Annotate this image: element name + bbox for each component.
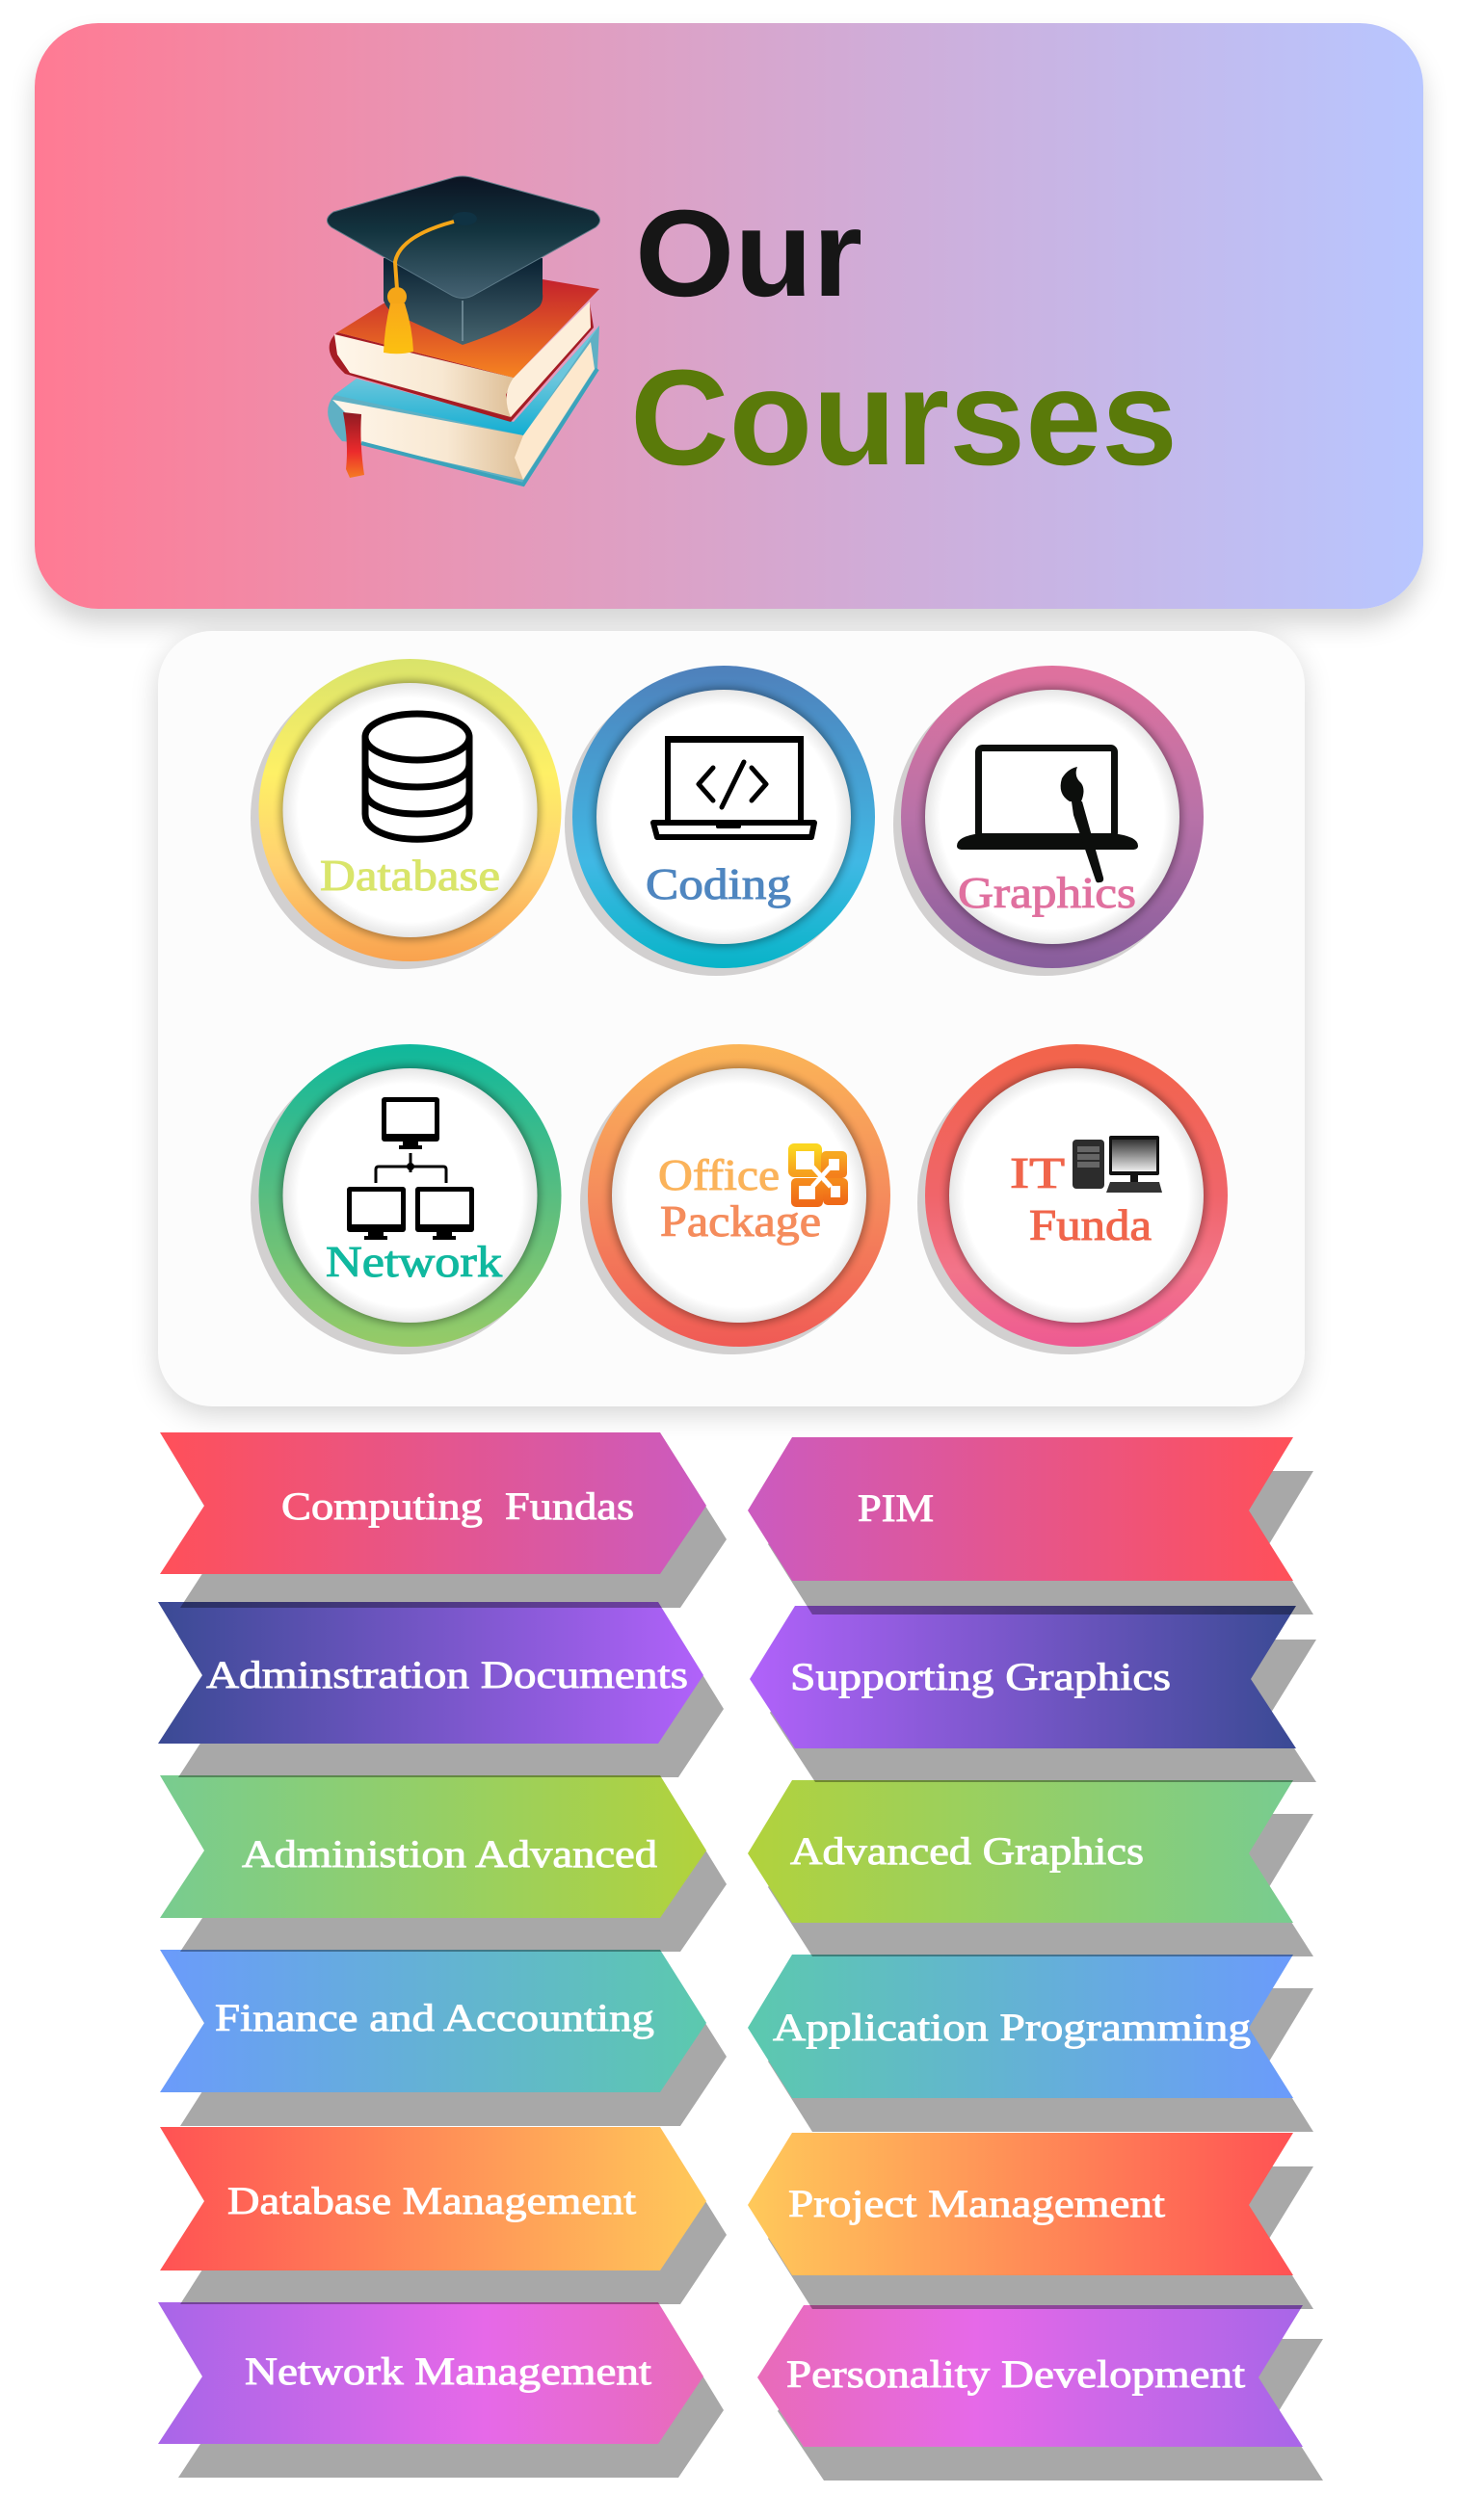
title word: Our: Our xyxy=(635,185,862,323)
ribbon: Supporting Graphics: Supporting Graphics xyxy=(790,1655,1171,1698)
ribbon: Administion Advanced xyxy=(160,1775,727,1952)
ribbon: Advanced Graphics: Advanced Graphics xyxy=(790,1829,1144,1873)
ribbon: Adminstration Documents xyxy=(158,1602,724,1777)
ribbon: Network Management: Network Management xyxy=(245,2349,651,2393)
ribbon: Personality Development xyxy=(757,2305,1323,2481)
ribbon: PIM xyxy=(748,1437,1313,1614)
ribbon: Finance and Accounting xyxy=(160,1950,727,2126)
ribbon: Advanced Graphics xyxy=(748,1780,1313,1956)
label: Package: Package xyxy=(660,1197,821,1246)
icon: laptop with paintbrush xyxy=(957,748,1138,882)
ribbon: Application Programming: Application Programming xyxy=(773,2006,1251,2049)
title word: Courses: Courses xyxy=(630,341,1178,493)
ribbon: Administion Advanced: Administion Advanced xyxy=(242,1832,657,1876)
ribbon: PIM: PIM xyxy=(858,1486,934,1530)
label: Coding: Coding xyxy=(646,860,791,908)
icon: office logo xyxy=(792,1147,844,1203)
icon: laptop with code xyxy=(653,736,814,837)
icon: graduation cap on books xyxy=(327,176,600,486)
ribbon: Project Management xyxy=(748,2133,1313,2309)
ribbon: Personality Development: Personality Development xyxy=(786,2352,1245,2396)
ribbon: Supporting Graphics xyxy=(750,1606,1316,1782)
label: Office: Office xyxy=(658,1151,780,1199)
badge: Network xyxy=(251,1044,561,1354)
ribbon: Database Management: Database Management xyxy=(227,2179,636,2222)
ribbon: Network Management xyxy=(158,2302,724,2478)
panel: header banner xyxy=(35,23,1423,609)
ribbon: Database Management xyxy=(160,2127,727,2304)
icon: network of computers xyxy=(347,1097,474,1240)
badge: Coding xyxy=(565,666,875,976)
panel: course categories xyxy=(158,631,1305,1406)
badge: Graphics xyxy=(893,666,1204,976)
badge: IT Funda xyxy=(917,1044,1228,1354)
icon: desktop computer xyxy=(1073,1136,1162,1193)
label: Funda: Funda xyxy=(1029,1201,1152,1249)
ribbon: Computing Fundas: Computing Fundas xyxy=(281,1484,634,1528)
ribbon: Application Programming xyxy=(748,1955,1313,2132)
label: Network: Network xyxy=(326,1238,503,1286)
mortarboard xyxy=(327,176,600,354)
ribbon: Project Management: Project Management xyxy=(788,2182,1165,2225)
upper red book xyxy=(330,279,599,422)
label: IT: IT xyxy=(1010,1149,1065,1197)
icon: database xyxy=(365,714,469,839)
badge: Office Package xyxy=(580,1044,890,1354)
badge: Database xyxy=(251,659,561,969)
title: Our Courses xyxy=(630,185,1178,493)
lower blue book xyxy=(328,326,599,486)
label: Database: Database xyxy=(320,852,500,900)
ribbon: Finance and Accounting: Finance and Accounting xyxy=(215,1996,654,2039)
label: Graphics: Graphics xyxy=(958,869,1136,917)
ribbon: Computing Fundas xyxy=(160,1432,727,1608)
ribbon: Adminstration Documents: Adminstration Documents xyxy=(206,1653,688,1696)
